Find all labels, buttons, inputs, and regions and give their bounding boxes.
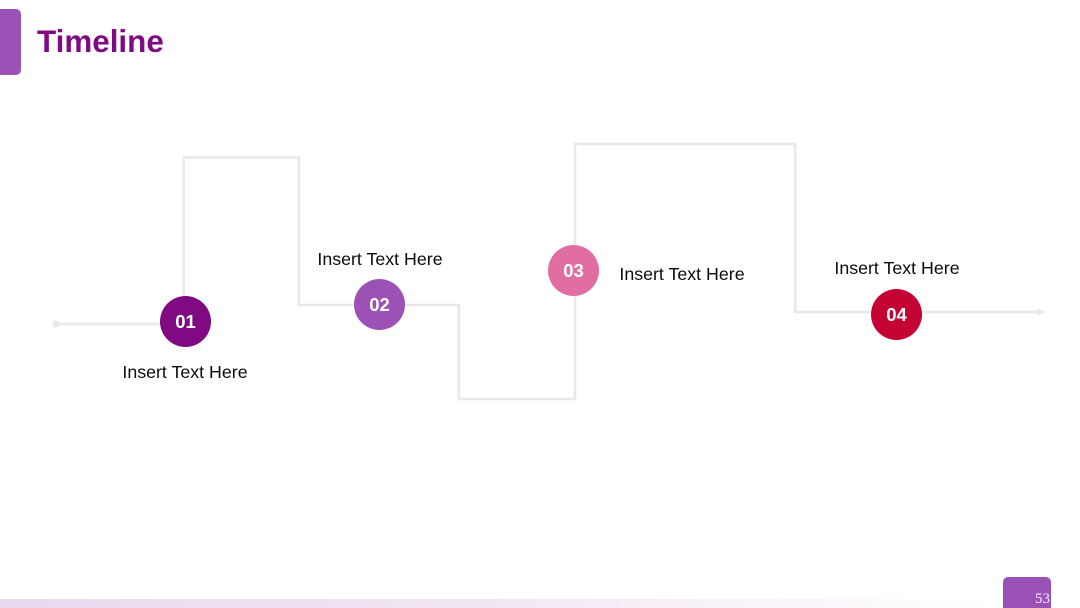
node 01: 01 (175, 311, 196, 332)
label 01: Insert Text Here (122, 362, 248, 382)
node 03 (548, 245, 599, 296)
node 01 (160, 296, 211, 347)
label 02: Insert Text Here (317, 249, 443, 269)
node 04 (871, 289, 922, 340)
node 04: 04 (886, 304, 907, 325)
header accent tab (0, 9, 21, 75)
footer gradient band (0, 599, 1080, 608)
node 03: 03 (563, 260, 584, 281)
page number badge (1003, 577, 1051, 608)
page number: 53 (1035, 591, 1050, 607)
label 03: Insert Text Here (619, 264, 745, 284)
node 02: 02 (369, 294, 390, 315)
title: Timeline (37, 24, 164, 59)
label 04: Insert Text Here (834, 258, 960, 278)
node 02 (354, 279, 405, 330)
